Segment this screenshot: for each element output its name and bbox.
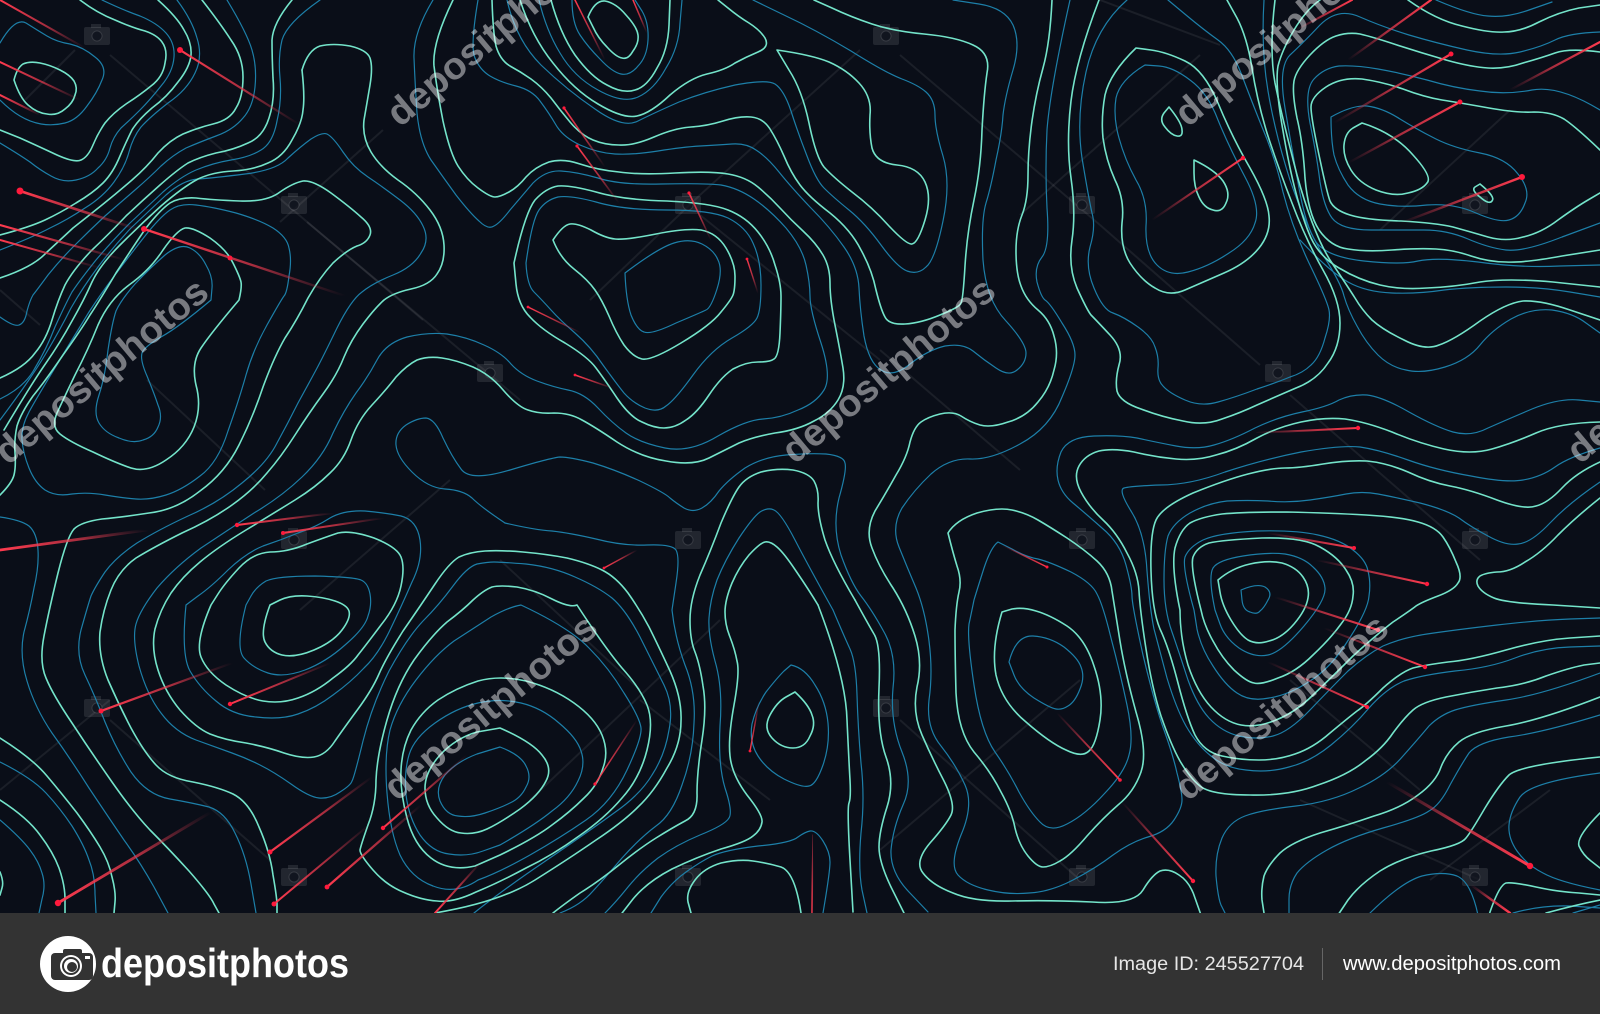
logo wordmark: depositphotos xyxy=(101,940,349,986)
camera watermark icons xyxy=(84,24,1488,886)
repeated diagonal watermarks: depositphotos xyxy=(1167,606,1397,809)
footer bar xyxy=(0,913,1600,1014)
footer divider xyxy=(1322,948,1323,980)
repeated diagonal watermarks xyxy=(0,0,1600,809)
icon: camera logo xyxy=(40,936,96,992)
repeated diagonal watermarks: depositphotos xyxy=(376,606,606,809)
website url: www.depositphotos.com xyxy=(1342,953,1561,975)
repeated diagonal watermarks: depositphotos xyxy=(774,269,1004,472)
image id label: Image ID: 245527704 xyxy=(1113,953,1304,975)
